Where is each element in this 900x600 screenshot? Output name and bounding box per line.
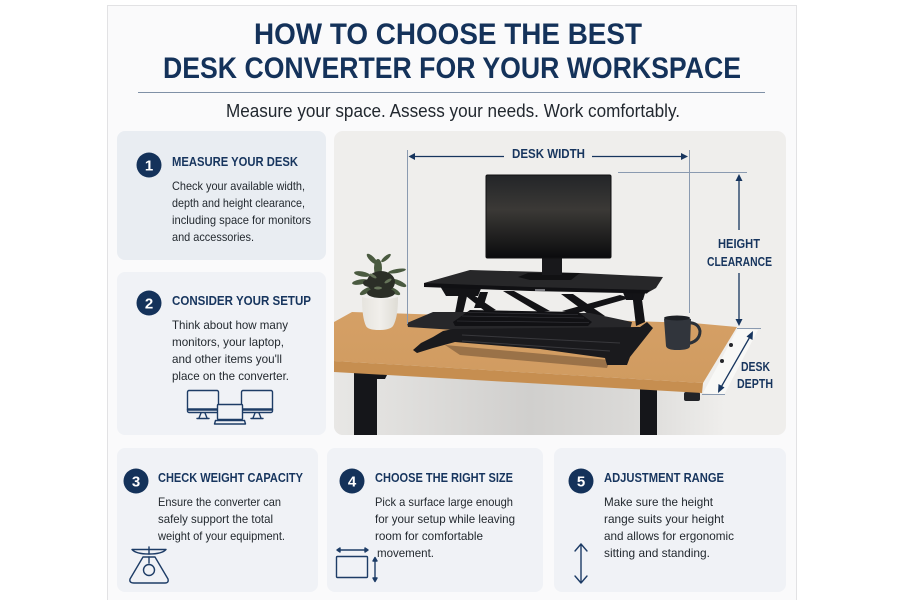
panel: step 5 adjustment range: range suits your height [604, 512, 725, 526]
desk top [334, 312, 737, 393]
panel: step 3 check weight capacity: 3 [132, 474, 140, 490]
panel: step 3 check weight capacity: CHECK WEIGHT CAPACITY [158, 470, 303, 485]
panel: step 4 choose the right size: CHOOSE THE RIGHT SIZE [375, 470, 513, 485]
subtitle: Measure your space. Assess your needs. Work comfortably. [226, 101, 680, 121]
panel: step 1 measure your desk: 1 [145, 158, 153, 174]
panel: step 3 check weight capacity: Ensure the converter can [158, 495, 281, 509]
panel: step 2 consider your setup [117, 272, 326, 435]
panel: step 2 consider your setup: and other items you'll [172, 352, 282, 366]
dimension: desk width [408, 147, 690, 324]
lower tray [407, 312, 632, 330]
monitor [486, 175, 611, 280]
panel: step 1 measure your desk: depth and height clearance, [172, 196, 305, 210]
icon: weighing scale [130, 547, 168, 583]
panel: step 1 measure your desk [117, 131, 326, 260]
panel: step 5 adjustment range: 5 [577, 474, 585, 490]
dimension: height clearance: HEIGHT [718, 237, 760, 251]
panel: step 2 consider your setup: CONSIDER YOUR SETUP [172, 293, 311, 308]
panel: step 4 choose the right size: movement. [377, 546, 434, 560]
desk legs [354, 343, 733, 435]
panel: step 1 measure your desk: MEASURE YOUR DESK [172, 154, 299, 169]
icon: size dimensions [336, 548, 377, 582]
panel: step 4 choose the right size [327, 448, 543, 592]
panel: step 2 consider your setup: monitors, your laptop, [172, 335, 284, 349]
panel: step 3 check weight capacity: weight of your equipment. [157, 529, 285, 543]
panel: step 4 choose the right size: for your setup while leaving [375, 512, 515, 526]
panel: step 1 measure your desk: including space for monitors [172, 213, 311, 227]
panel: step 5 adjustment range: sitting and standing. [604, 546, 710, 560]
panel: step 5 adjustment range [554, 448, 786, 592]
panel: step 4 choose the right size: Pick a surface large enough [375, 495, 513, 509]
icon: monitors and laptop [188, 390, 272, 424]
panel: step 5 adjustment range: ADJUSTMENT RANGE [604, 470, 724, 485]
title rule [138, 92, 765, 94]
panel: step 3 check weight capacity [117, 448, 318, 592]
panel: step 2 consider your setup: place on the converter. [172, 369, 289, 383]
mug [664, 316, 700, 350]
icon: vertical range arrow [575, 544, 587, 583]
dimension: desk depth [702, 328, 773, 394]
dimension: desk depth: DEPTH [737, 377, 773, 391]
converter shadow [445, 345, 610, 368]
keyboard [453, 310, 592, 326]
panel: desk illustration [334, 131, 786, 435]
page card [108, 6, 796, 600]
panel: step 2 consider your setup: 2 [145, 296, 153, 312]
panel: step 4 choose the right size: room for comfortable [375, 529, 483, 543]
title [163, 18, 741, 85]
panel: step 5 adjustment range: and allows for ergonomic [604, 529, 734, 543]
title: DESK CONVERTER FOR YOUR WORKSPACE [163, 52, 741, 85]
panel: step 5 adjustment range: Make sure the height [604, 495, 714, 509]
dimension: height clearance [618, 172, 772, 326]
plant [352, 252, 407, 330]
panel: step 1 measure your desk: and accessories. [172, 230, 254, 244]
panel: step 2 consider your setup: Think about how many [172, 318, 288, 332]
base [413, 322, 653, 365]
dimension: height clearance: CLEARANCE [707, 255, 772, 269]
wall background [334, 131, 786, 435]
dimension: desk depth: DESK [741, 360, 770, 374]
title: HOW TO CHOOSE THE BEST [254, 18, 642, 51]
uprights and scissor arms [440, 286, 646, 326]
panel: step 1 measure your desk: Check your available width, [172, 179, 305, 193]
standing desk converter [407, 175, 663, 365]
panel: step 3 check weight capacity: safely support the total [158, 512, 273, 526]
upper surface [424, 270, 663, 293]
dimension: desk width: DESK WIDTH [512, 147, 585, 161]
panel: step 4 choose the right size: 4 [348, 474, 357, 490]
lower wall [335, 373, 688, 435]
